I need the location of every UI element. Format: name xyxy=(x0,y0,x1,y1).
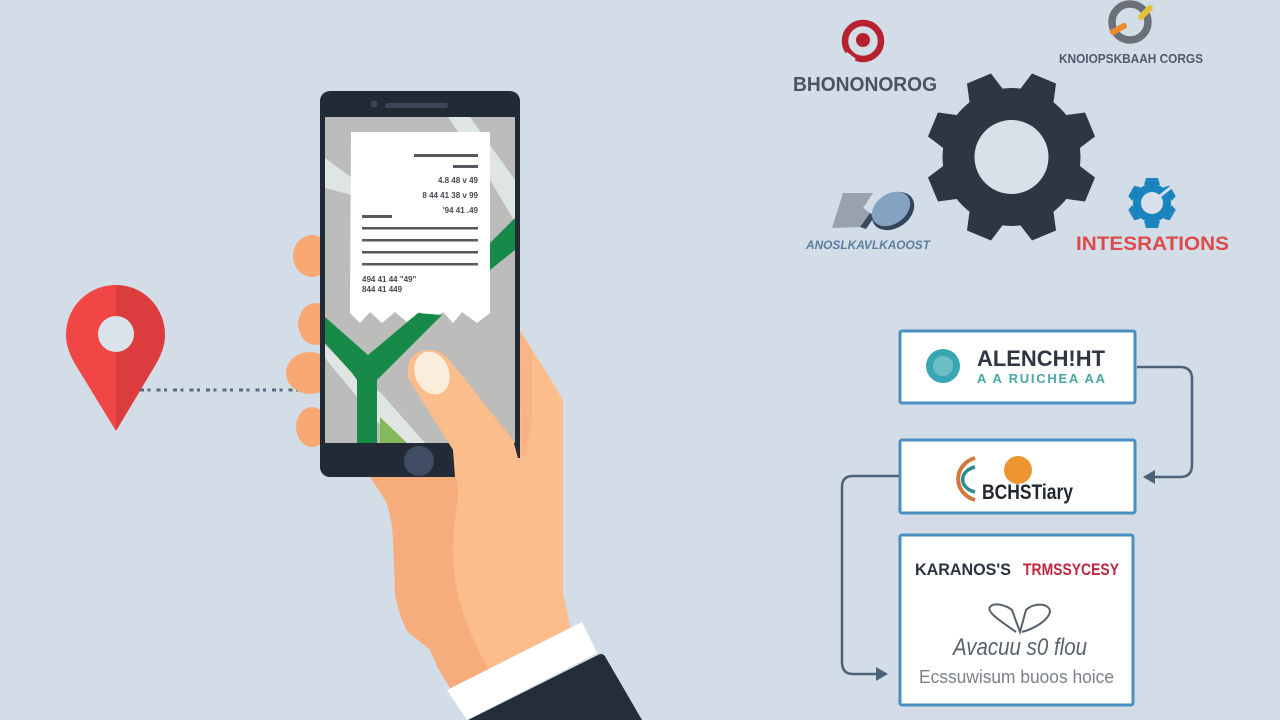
map screen xyxy=(325,117,515,443)
flow box 1: A A RUICHEA AA xyxy=(977,371,1106,386)
arrow: box 2 to box 3 xyxy=(842,476,899,681)
receipt line items: 4.8 48 v 49 xyxy=(438,176,479,185)
receipt line items: 8 44 41 38 v 99 xyxy=(422,191,479,200)
logo: blue-grey BO mark with label: ANOSLKAVLKAOOST xyxy=(805,238,932,252)
logo: grey ring with label: KNOIOPSKBAAH CORGS xyxy=(1059,51,1203,66)
icon: large central gear xyxy=(926,72,1097,242)
logo: red P with label xyxy=(793,23,937,96)
shirt cuff xyxy=(447,622,597,720)
icon: heart outline xyxy=(989,604,1050,632)
receipt xyxy=(350,132,490,323)
logo: red P with label: BHONONOROG xyxy=(793,74,937,96)
flow box 2: BCHSTiary xyxy=(982,481,1073,504)
receipt line items: 494 41 44 "49" xyxy=(362,275,417,284)
flow box 3: KARANOS'S xyxy=(915,560,1011,579)
teal emblem xyxy=(926,349,960,383)
palm shadow side xyxy=(370,470,500,690)
flow box 1 xyxy=(900,331,1135,403)
logo: blue gear with Integrations label: INTESRATIONS xyxy=(1076,234,1229,255)
home button xyxy=(404,446,434,476)
green route xyxy=(325,313,442,443)
phone xyxy=(320,91,520,477)
logo: grey ring with label xyxy=(1059,4,1203,66)
thumbnail xyxy=(408,346,456,400)
phone body xyxy=(320,91,520,477)
flow box 2 xyxy=(900,440,1135,513)
flow box 3: TRMSSYCESY xyxy=(1023,560,1120,579)
icon: location pin xyxy=(66,285,165,431)
flow box 3: Avacuu s0 flou xyxy=(951,634,1087,661)
orange and teal emblem xyxy=(958,456,1032,500)
fingers behind phone xyxy=(286,235,334,447)
receipt line items xyxy=(362,176,479,294)
logo: blue gear with Integrations label xyxy=(1076,178,1229,255)
palm light side xyxy=(453,330,571,680)
logo: blue-grey BO mark with label xyxy=(805,184,932,252)
phone speaker and camera xyxy=(370,100,448,108)
thumb xyxy=(408,350,522,482)
flow box 3: Ecssuwisum buoos hoice xyxy=(919,667,1114,687)
jacket sleeve xyxy=(468,654,642,720)
hand shading strip xyxy=(520,333,532,458)
dotted connector from pin to phone xyxy=(140,388,358,392)
arrow: box 1 to box 2 xyxy=(1137,367,1192,484)
receipt line items: '94 41 .49 xyxy=(443,206,479,215)
receipt line items: 844 41 449 xyxy=(362,285,403,294)
flow box 3 xyxy=(900,535,1133,705)
illustration: hand holding phone xyxy=(286,91,642,720)
flow box 1: ALENCH!HT xyxy=(977,346,1106,371)
